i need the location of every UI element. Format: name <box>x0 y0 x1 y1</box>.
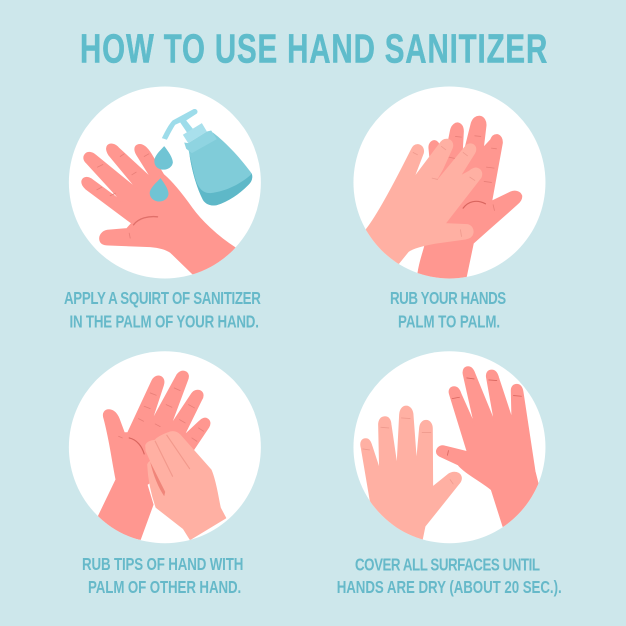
caption: apply: IN THE PALM OF YOUR HAND. <box>70 313 259 332</box>
icon: left hand <box>361 406 461 539</box>
panel: palm to palm <box>353 86 545 280</box>
caption: palm to palm: PALM TO PALM. <box>398 313 500 332</box>
icon: back hand <box>99 371 210 539</box>
icon: sanitizer bottle <box>162 109 252 205</box>
icon: front hand <box>146 432 226 539</box>
caption: rub tips: RUB TIPS OF HAND WITH <box>82 555 243 575</box>
panel: apply sanitizer <box>69 86 261 278</box>
title: HOW TO USE HAND SANITIZER <box>80 26 547 72</box>
caption: rub tips: PALM OF OTHER HAND. <box>88 578 241 598</box>
caption: palm to palm <box>390 289 506 332</box>
icon: back hand <box>418 116 522 280</box>
icon: right hand <box>437 367 538 526</box>
caption: palm to palm: RUB YOUR HANDS <box>390 289 506 309</box>
panel: cover all surfaces <box>353 351 545 543</box>
icon: falling drops <box>150 146 173 202</box>
caption: rub tips <box>82 555 243 598</box>
caption: cover all surfaces: HANDS ARE DRY (ABOUT 20 SEC.). <box>337 578 562 598</box>
caption: cover all surfaces: COVER ALL SURFACES UNTIL <box>355 556 540 575</box>
caption: apply <box>64 289 261 332</box>
icon: front hand <box>365 139 482 264</box>
caption: cover all surfaces <box>337 556 562 598</box>
caption: apply: APPLY A SQUIRT OF SANITIZER <box>64 289 261 309</box>
panel: rub tips <box>69 351 261 543</box>
icon: hand receiving sanitizer <box>82 144 236 274</box>
